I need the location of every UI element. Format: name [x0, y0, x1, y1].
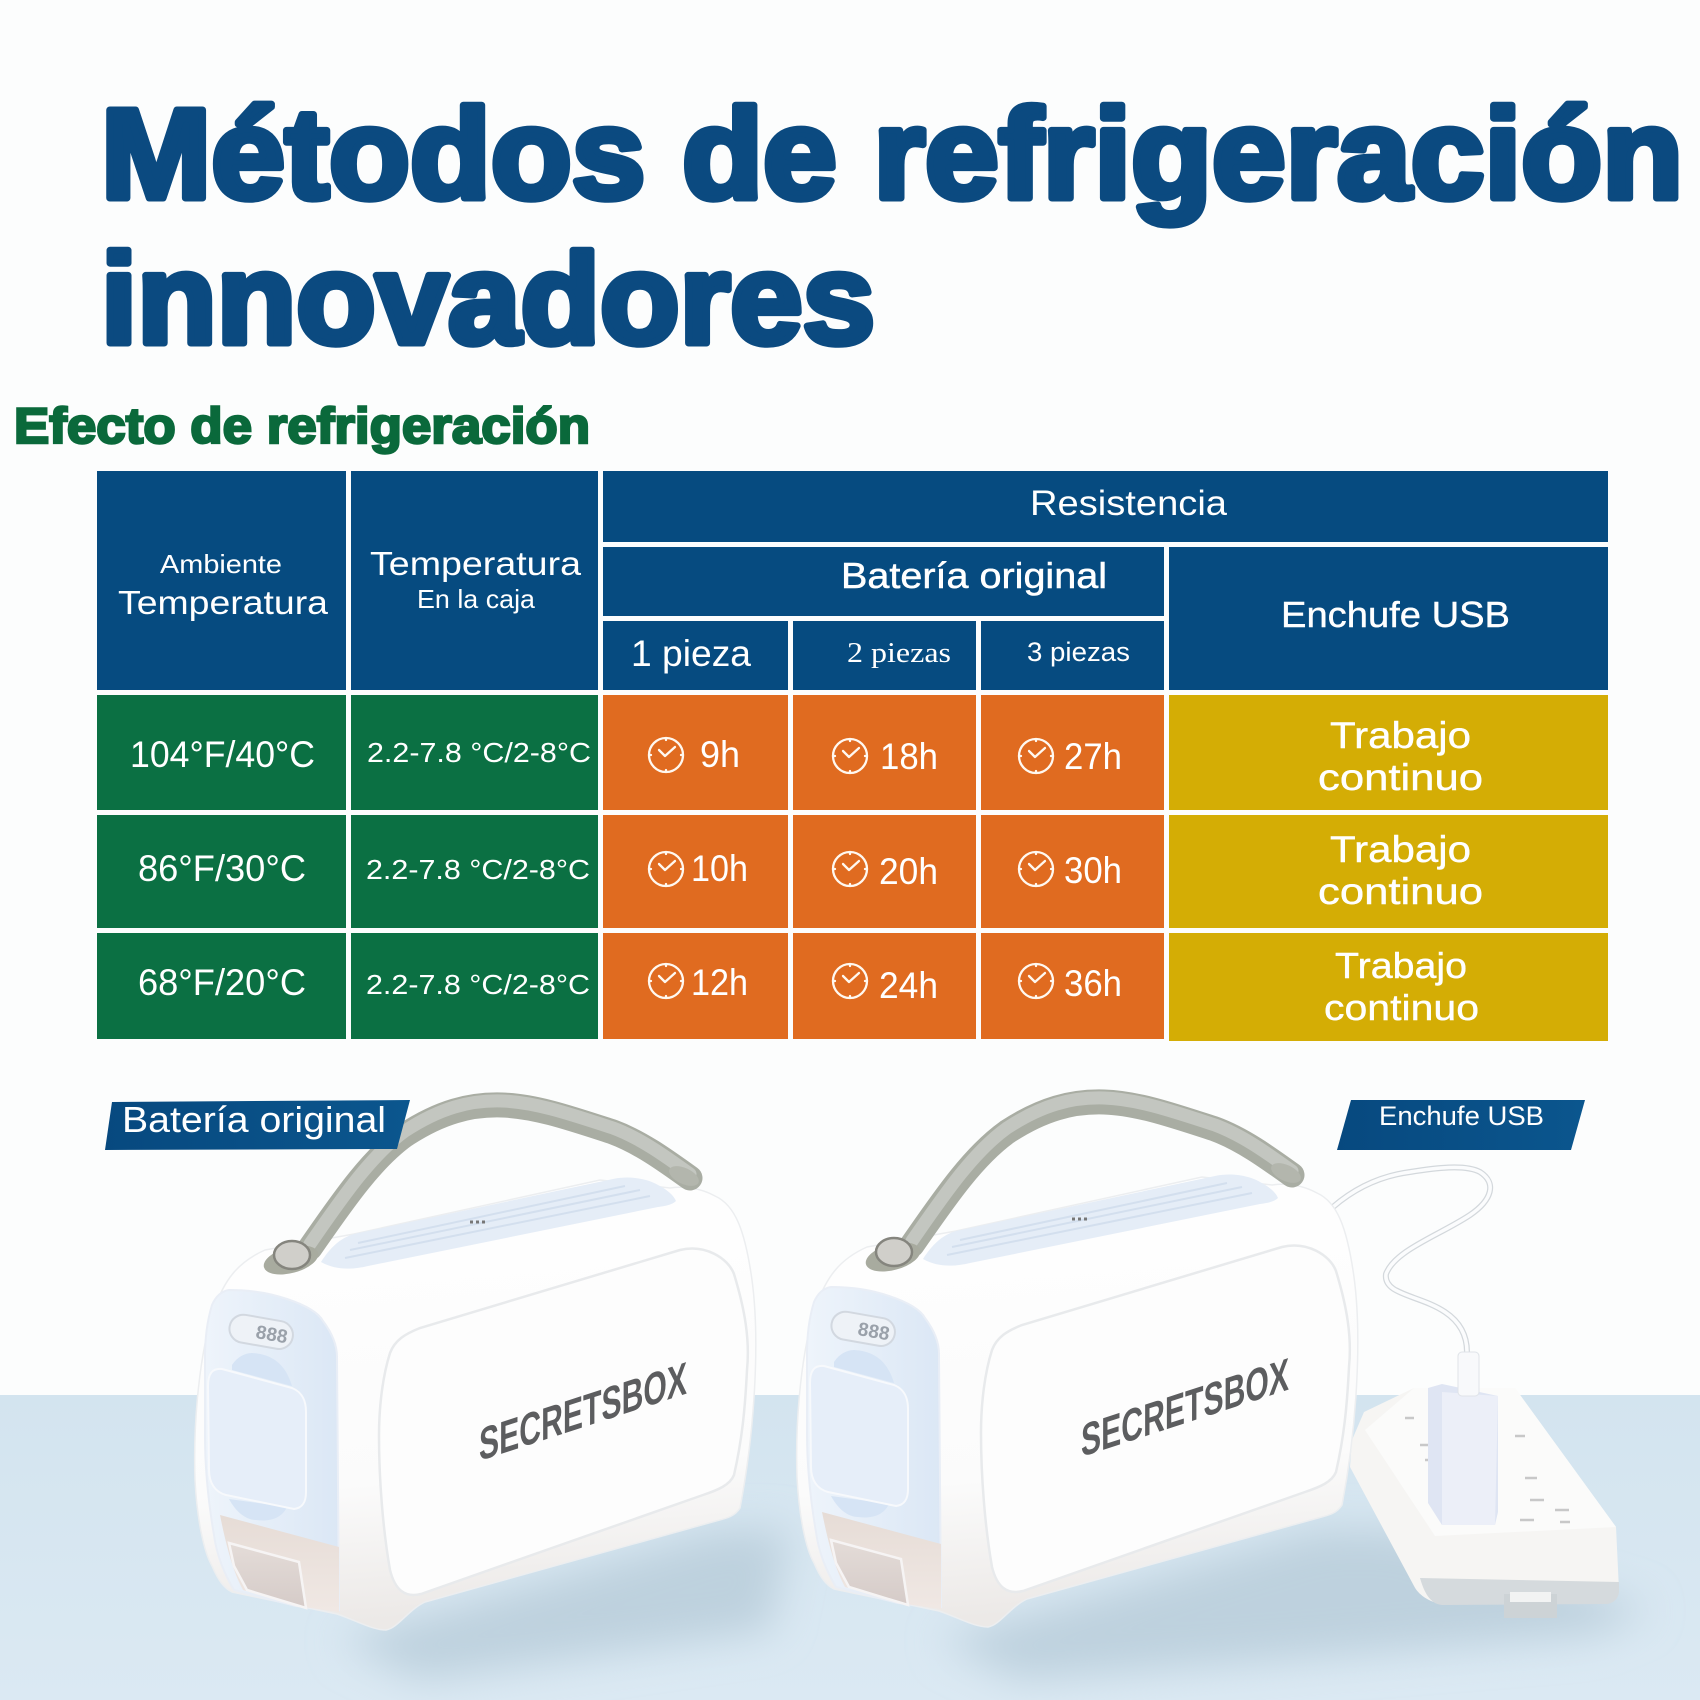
- plug: [1458, 1352, 1479, 1396]
- header cell: ambient temperature: Temperatura: [118, 584, 329, 621]
- badge: original battery: Batería original: [122, 1099, 386, 1140]
- box temperature cell: [351, 695, 598, 810]
- 2 pieces: 18h: 18h: [880, 736, 938, 777]
- cooling effect table: [97, 471, 1608, 1041]
- box temperature cell: [351, 933, 598, 1039]
- header cell: 3 pieces: 3 piezas: [1027, 637, 1130, 667]
- charger: [1428, 1384, 1498, 1525]
- header cell: original battery: Batería original: [841, 555, 1107, 596]
- 1 piece: 12h: [603, 933, 788, 1039]
- USB: continuous work: Trabajo: [1330, 715, 1471, 756]
- header cell: box temperature: Temperatura: [370, 545, 582, 582]
- front blue panel: [205, 1290, 339, 1610]
- title: Métodos de refrigeración: [101, 83, 1683, 226]
- box temperature cell: 2.2-7.8 °C/2-8°C: [366, 969, 590, 1000]
- title: [101, 83, 1683, 371]
- 3 pieces: 27h: [981, 695, 1164, 810]
- badge: USB plug: [1337, 1100, 1585, 1150]
- 1 piece: 10h: 10h: [691, 848, 748, 889]
- USB: continuous work: continuo: [1324, 987, 1479, 1028]
- 2 pieces: 18h: [793, 695, 976, 810]
- device body: [195, 1180, 756, 1630]
- header cell: USB plug: [1169, 547, 1608, 690]
- 2 pieces: 20h: 20h: [879, 851, 938, 892]
- strip body: [1350, 1388, 1619, 1604]
- header cell: box temperature: [351, 471, 598, 690]
- header cell: endurance: [603, 471, 1608, 542]
- badge: USB plug: Enchufe USB: [1379, 1101, 1544, 1131]
- 1 piece: 10h: [603, 815, 788, 928]
- sockets: [1405, 1418, 1570, 1522]
- header cell: 3 pieces: [981, 621, 1164, 690]
- header cell: 1 piece: [603, 621, 788, 690]
- handle stud: [261, 1162, 702, 1280]
- charger front: [1442, 1392, 1498, 1525]
- 2 pieces: 20h: [793, 815, 976, 928]
- USB: continuous work: [1169, 695, 1608, 810]
- USB: continuous work: [1169, 815, 1608, 928]
- 2 pieces: 24h: [793, 933, 976, 1039]
- ambient temperature cell: 104°F/40°C: [130, 734, 315, 775]
- header cell: 1 piece: 1 pieza: [631, 633, 751, 674]
- header cell: 2 pieces: 2 piezas: [847, 638, 951, 669]
- 1 piece: 9h: [603, 695, 788, 810]
- USB: continuous work: continuo: [1318, 871, 1483, 912]
- 3 pieces: 27h: 27h: [1064, 736, 1122, 777]
- 1 piece: 9h: 9h: [700, 734, 740, 775]
- 3 pieces: 36h: 36h: [1064, 963, 1122, 1004]
- USB: continuous work: [1169, 933, 1608, 1041]
- box temperature cell: [351, 815, 598, 928]
- USB: continuous work: Trabajo: [1335, 945, 1467, 986]
- product: device on battery: [195, 1101, 756, 1630]
- header cell: original battery: [603, 547, 1164, 616]
- USB: continuous work: Trabajo: [1330, 829, 1471, 870]
- ambient temperature cell: 86°F/30°C: [138, 848, 306, 889]
- 3 pieces: 30h: [981, 815, 1164, 928]
- header cell: USB plug: Enchufe USB: [1281, 594, 1510, 635]
- box temperature cell: 2.2-7.8 °C/2-8°C: [367, 737, 591, 768]
- 3 pieces: 30h: 30h: [1064, 850, 1122, 891]
- floor shadows: [340, 1530, 1650, 1680]
- ambient temperature cell: [97, 815, 346, 928]
- title: innovadores: [101, 228, 875, 371]
- section heading: Efecto de refrigeración: [14, 398, 590, 454]
- display: [227, 1312, 295, 1351]
- strip top face: [1365, 1388, 1616, 1536]
- device logo: SECRETSBOX: [1081, 1348, 1289, 1468]
- product: device on USB: [797, 1098, 1358, 1627]
- embossed side panel: [379, 1249, 748, 1595]
- USB: continuous work: continuo: [1318, 757, 1483, 798]
- strip grey base: [1420, 1578, 1619, 1605]
- 3 pieces: 36h: [981, 933, 1164, 1039]
- header cell: ambient temperature: [97, 471, 346, 690]
- header cell: ambient temperature: Ambiente: [160, 549, 282, 579]
- USB plug and charger: [1428, 1352, 1498, 1525]
- header cell: 2 pieces: [793, 621, 976, 690]
- handle: [310, 1101, 690, 1248]
- row: 68°F: [97, 933, 1608, 1041]
- top vent: [321, 1178, 676, 1269]
- badge: original battery: [105, 1099, 410, 1150]
- ambient temperature cell: [97, 933, 346, 1039]
- ambient temperature cell: 68°F/20°C: [138, 962, 306, 1003]
- 1 piece: 12h: 12h: [691, 962, 748, 1003]
- USB cable: [1333, 1167, 1490, 1352]
- row: 104°F: [97, 695, 1608, 810]
- header cell: box temperature: En la caja: [417, 584, 536, 614]
- door recess: [229, 1353, 292, 1520]
- tab: [1504, 1592, 1557, 1618]
- row: 86°F: [97, 815, 1608, 928]
- ambient temperature cell: [97, 695, 346, 810]
- transparent window: [229, 1543, 306, 1608]
- display: 888: [254, 1322, 289, 1348]
- box temperature cell: 2.2-7.8 °C/2-8°C: [366, 854, 590, 885]
- beige water tank: [220, 1515, 339, 1612]
- door: [208, 1369, 306, 1509]
- device logo: SECRETSBOX: [479, 1352, 687, 1472]
- power strip: [1350, 1388, 1619, 1618]
- header cell: endurance: Resistencia: [1030, 484, 1228, 523]
- 2 pieces: 24h: 24h: [879, 965, 938, 1006]
